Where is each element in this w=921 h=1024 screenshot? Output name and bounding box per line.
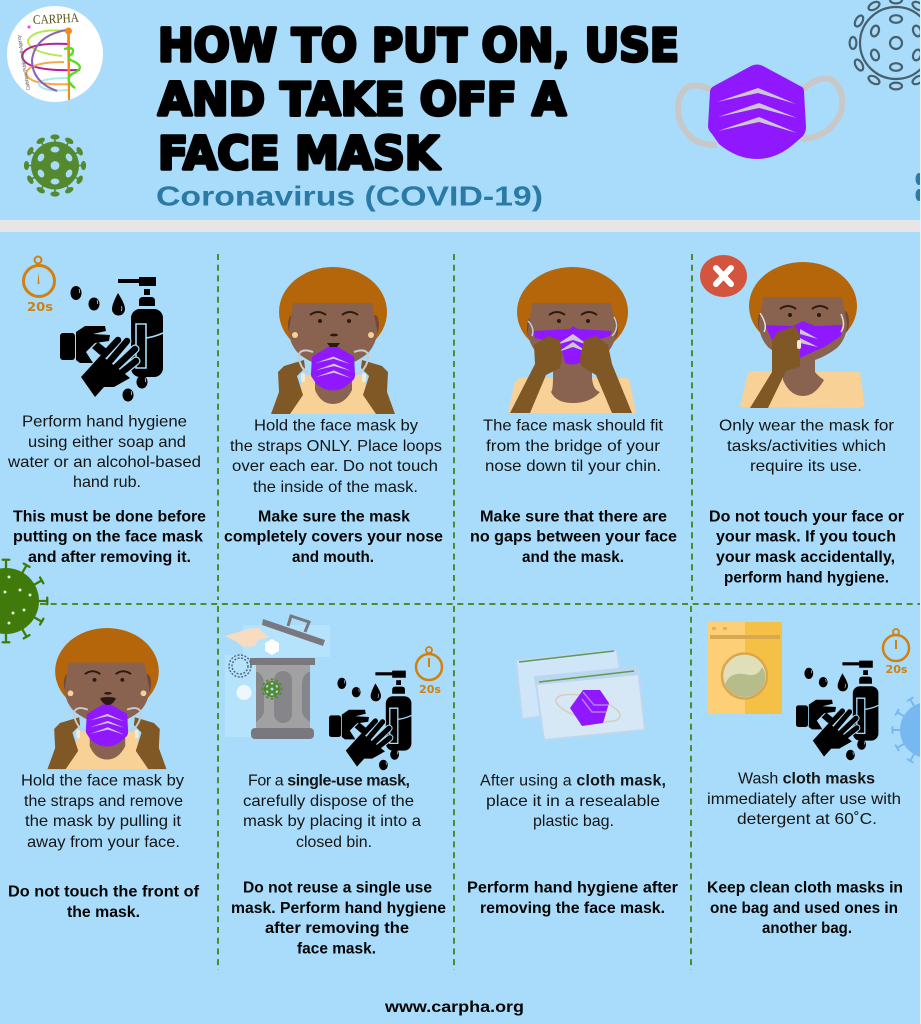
text: instructions (243, 772, 421, 851)
panel: step 2 hold by straps (224, 267, 443, 566)
text: emphasis: completely covers your nose (224, 528, 443, 546)
icon: 20 second timer (416, 647, 442, 696)
text: emphasis (709, 508, 904, 586)
text: instructions (7, 414, 201, 491)
text: emphasis: another bag. (762, 920, 852, 937)
text: instructions: from the bridge of your (486, 438, 661, 455)
text: instructions: require its use. (750, 458, 862, 475)
icon: hand washing (60, 277, 163, 402)
text: instructions: tasks/activities which (727, 438, 886, 455)
icon: cropped teal virus at right edge (916, 173, 921, 201)
text: instructions: detergent at 60˚C. (737, 811, 877, 828)
footer url: www.carpha.org (384, 999, 524, 1016)
panel: step 5 remove mask (8, 628, 200, 921)
icon: resealable plastic bags with mask (516, 650, 645, 740)
icon: hand washing (329, 671, 411, 770)
figure: holding mask by straps (271, 267, 395, 414)
header band divider (0, 220, 921, 232)
dividers (40, 254, 921, 970)
icon: large purple face mask (678, 64, 842, 159)
icon: 20 second timer: 20s (886, 663, 908, 676)
panel: step 6 dispose in bin (225, 616, 446, 958)
icon: 20 second timer: 20s (419, 683, 441, 696)
text: instructions: For a single-use mask, (248, 772, 410, 790)
title: HOW TO PUT ON, USE (158, 19, 679, 72)
text: emphasis: mask. Perform hand hygiene (231, 900, 446, 917)
icon: 20 second timer: 20s (27, 299, 53, 314)
text: instructions: mask by placing it into a (243, 813, 421, 830)
text: instructions: plastic bag. (533, 813, 614, 830)
text: emphasis: Keep clean cloth masks in (707, 880, 903, 896)
logo: CARPHA (7, 6, 103, 102)
text: instructions: Wash cloth masks (738, 770, 875, 788)
text: emphasis: and mouth. (292, 549, 374, 566)
text: emphasis: Perform hand hygiene after (467, 880, 678, 896)
title: FACE MASK (158, 127, 441, 180)
text: instructions: Hold the face mask by (21, 772, 184, 790)
logo: CARPHA: Caribbean Public Health Agency (16, 34, 32, 91)
icon: hand washing (796, 661, 878, 760)
text: emphasis: after removing the (265, 920, 409, 937)
text: instructions: carefully dispose of the (243, 793, 414, 810)
icon: large green virus at left edge (0, 560, 47, 642)
text: emphasis: This must be done before (13, 508, 206, 526)
figure: fitting the mask (508, 267, 636, 413)
icon: washing machine (708, 622, 782, 714)
text: emphasis: your mask accidentally, (716, 549, 895, 566)
text: emphasis (707, 880, 903, 937)
subtitle: Coronavirus (COVID-19) (156, 180, 543, 212)
text: emphasis: Make sure the mask (258, 508, 410, 526)
text: instructions: immediately after use with (707, 791, 901, 808)
text: emphasis: face mask. (297, 940, 376, 958)
text: emphasis: putting on the face mask (13, 528, 203, 546)
text: emphasis: one bag and used ones in (710, 900, 898, 917)
text: instructions: hand rub. (73, 474, 141, 491)
text: instructions: closed bin. (296, 834, 372, 851)
text: emphasis: Do not reuse a single use (243, 880, 432, 896)
icon: 20 second timer (24, 256, 54, 314)
title: AND TAKE OFF A (158, 73, 566, 126)
icon: red X badge (700, 255, 747, 297)
text: emphasis: your mask. If you touch (716, 528, 896, 546)
panel: step 8 wash cloth masks (707, 622, 921, 937)
text: emphasis (224, 508, 443, 566)
icon: outlined virus (850, 0, 921, 89)
text: emphasis (231, 880, 446, 958)
text: instructions: the inside of the mask. (253, 479, 418, 496)
text: instructions: After using a cloth mask, (480, 772, 666, 790)
text: instructions: Only wear the mask for (719, 418, 895, 434)
text: instructions (719, 418, 895, 475)
text: instructions (480, 772, 666, 830)
text: instructions: the straps and remove (24, 793, 183, 810)
text: instructions (21, 772, 184, 851)
text: instructions: water or an alcohol-based (7, 454, 201, 471)
text: emphasis (470, 508, 677, 566)
panel: step 7 plastic bag (467, 650, 678, 917)
text: emphasis: the mask. (67, 904, 140, 921)
figure: removing the mask (47, 628, 167, 769)
text: instructions: using either soap and (28, 434, 186, 451)
text: emphasis: and after removing it. (28, 549, 191, 566)
text: emphasis: and the mask. (522, 549, 624, 566)
text: emphasis: removing the face mask. (480, 900, 665, 917)
logo: CARPHA: CARPHA (33, 10, 80, 27)
text: emphasis (467, 880, 678, 917)
figure: touching the mask (740, 262, 864, 408)
text: emphasis (8, 884, 200, 921)
icon: 20 second timer (883, 629, 909, 676)
text: emphasis: Do not touch your face or (709, 508, 904, 526)
icon: green virus (24, 134, 86, 197)
text: emphasis: no gaps between your face (470, 528, 677, 546)
title (158, 19, 679, 180)
icon: blue virus at right edge (892, 694, 921, 766)
text: instructions: place it in a resealable (486, 793, 660, 810)
text: emphasis: Make sure that there are (480, 508, 667, 526)
text: instructions: nose down til your chin. (485, 458, 661, 475)
icon: trash bin with hand and viruses (225, 616, 330, 739)
text: instructions: Perform hand hygiene (22, 414, 187, 430)
text: instructions: The face mask should fit (483, 418, 664, 434)
text: emphasis (13, 508, 206, 566)
text: instructions: away from your face. (27, 834, 180, 851)
panel: step 3 fit mask (470, 267, 677, 566)
text: instructions (707, 770, 901, 828)
text: instructions: Hold the face mask by (254, 418, 418, 434)
panel: step 1 hand hygiene (7, 256, 206, 566)
text: instructions: over each ear. Do not touch (232, 458, 438, 475)
text: instructions: the straps ONLY. Place loops (230, 438, 442, 455)
text: emphasis: perform hand hygiene. (724, 570, 889, 586)
text: instructions (230, 418, 442, 496)
text: instructions: the mask by pulling it (25, 813, 182, 830)
panel: step 4 do not touch (700, 255, 904, 586)
text: instructions (483, 418, 664, 475)
text: emphasis: Do not touch the front of (8, 884, 200, 900)
